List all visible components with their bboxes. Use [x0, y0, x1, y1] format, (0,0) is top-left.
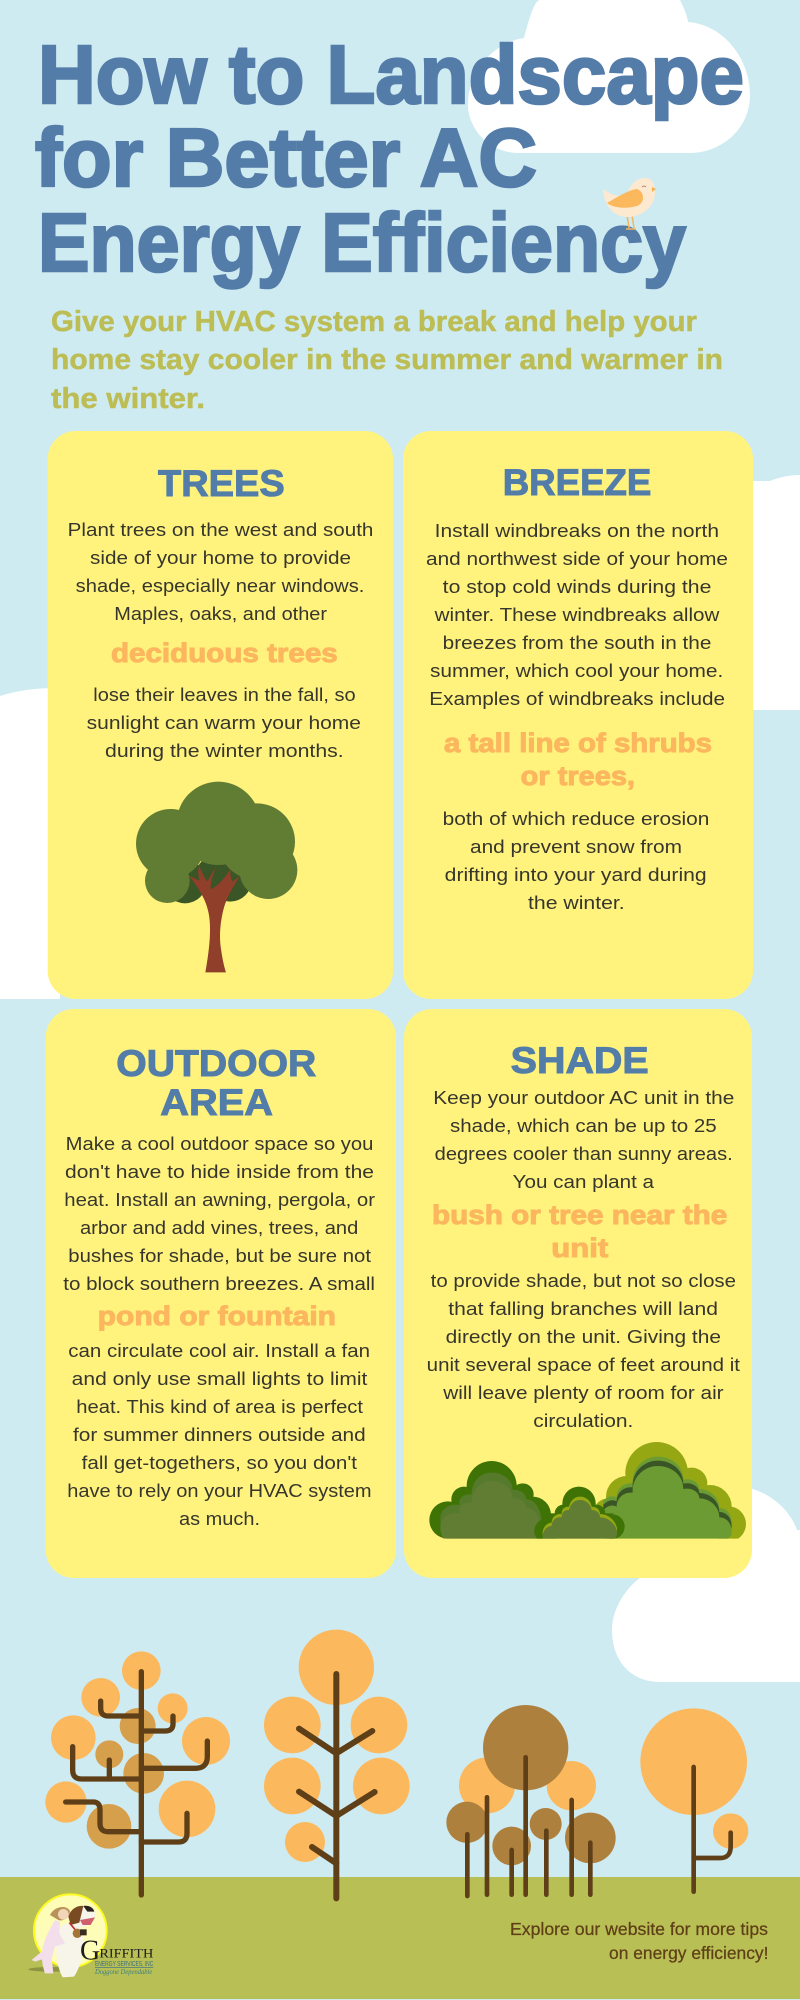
- logo wordmark: Doggone Dependable: [94, 1968, 152, 1976]
- text: shade intro: degrees cooler than sunny areas.: [435, 1143, 733, 1164]
- text: outdoor intro: Make a cool outdoor space so you: [66, 1133, 373, 1154]
- text: breeze intro: and northwest side of your home: [426, 548, 728, 569]
- text: shade continued: that falling branches will land: [448, 1298, 718, 1319]
- text: shade continued: unit several space of feet around it: [427, 1354, 740, 1375]
- text: shade continued: [427, 1270, 740, 1431]
- highlight: bush or tree near the unit: [432, 1200, 727, 1263]
- panel: trees: [48, 431, 393, 999]
- logo wordmark: G: [80, 1935, 100, 1966]
- orange tree 2: [264, 1630, 410, 1898]
- text: outdoor intro: [63, 1133, 375, 1294]
- text: shade intro: Keep your outdoor AC unit in the: [433, 1087, 734, 1108]
- text: breeze intro: breezes from the south in the: [443, 632, 711, 653]
- text: shade continued: circulation.: [533, 1410, 633, 1431]
- text: outdoor continued: have to rely on your HVAC system: [67, 1480, 372, 1501]
- text: breeze intro: winter. These windbreaks allow: [434, 604, 720, 625]
- panel: shade: [404, 1009, 752, 1578]
- heading: trees: TREES: [158, 463, 285, 504]
- icon: bushes: [429, 1442, 746, 1543]
- text: trees continued: lose their leaves in the fall, so: [93, 684, 356, 705]
- panel: breeze: [403, 431, 753, 999]
- heading: shade: SHADE: [511, 1040, 649, 1081]
- text: trees intro: Plant trees on the west and south: [68, 519, 373, 540]
- text: trees intro: side of your home to provide: [90, 547, 351, 568]
- text: trees intro: shade, especially near windows.: [76, 575, 364, 596]
- subtitle: home stay cooler in the summer and warmer in: [51, 344, 723, 376]
- icon: green tree: [136, 782, 297, 972]
- text: trees intro: [68, 519, 373, 624]
- text: outdoor intro: bushes for shade, but be sure not: [68, 1245, 371, 1266]
- text: shade continued: directly on the unit. Giving the: [446, 1326, 721, 1347]
- highlight: pond or fountain: pond or fountain: [98, 1301, 336, 1331]
- text: outdoor continued: and only use small lights to limit: [72, 1368, 367, 1389]
- text: outdoor continued: heat. This kind of area is perfect: [76, 1396, 363, 1417]
- highlight: tall line of shrubs: a tall line of shrubs: [444, 728, 712, 758]
- text: breeze continued: [443, 808, 709, 913]
- text: outdoor continued: can circulate cool air. Install a fan: [68, 1340, 370, 1361]
- icon: dog: [28, 1906, 95, 1977]
- text: breeze intro: [426, 520, 728, 709]
- heading: outdoor area: [116, 1043, 316, 1123]
- text: outdoor intro: to block southern breezes. A small: [63, 1273, 375, 1294]
- subtitle: [51, 306, 723, 415]
- text: outdoor continued: for summer dinners outside and: [73, 1424, 366, 1445]
- highlight: bush or tree near the unit: unit: [551, 1233, 608, 1263]
- logo wordmark: [80, 1935, 153, 1976]
- cloud: top right: [468, 0, 750, 153]
- text: breeze intro: Examples of windbreaks include: [429, 688, 725, 709]
- title: for Better AC: [35, 111, 537, 204]
- text: outdoor intro: don't have to hide inside from the: [65, 1161, 374, 1182]
- text: shade intro: You can plant a: [513, 1171, 655, 1192]
- text: breeze intro: Install windbreaks on the north: [435, 520, 719, 541]
- icon: bird: [603, 178, 656, 229]
- text: breeze continued: both of which reduce erosion: [443, 808, 709, 829]
- text: breeze continued: the winter.: [528, 892, 625, 913]
- text: trees continued: [87, 684, 361, 761]
- panel: outdoor area: [46, 1009, 396, 1578]
- text: outdoor continued: [67, 1340, 372, 1529]
- heading: outdoor area: AREA: [160, 1082, 273, 1123]
- logo wordmark: RIFFITH: [99, 1946, 153, 1960]
- text: shade continued: to provide shade, but not so close: [431, 1270, 736, 1291]
- title: [35, 28, 744, 289]
- orange tree 4: [640, 1708, 748, 1892]
- highlight: tall line of shrubs: or trees,: [521, 761, 635, 791]
- text: breeze continued: drifting into your yard during: [445, 864, 707, 885]
- text: trees intro: Maples, oaks, and other: [114, 603, 327, 624]
- text: breeze continued: and prevent snow from: [470, 836, 682, 857]
- subtitle: Give your HVAC system a break and help your: [51, 306, 697, 338]
- text: outdoor intro: heat. Install an awning, pergola, or: [64, 1189, 375, 1210]
- highlight: deciduous trees: deciduous trees: [111, 638, 338, 668]
- text: breeze intro: summer, which cool your home.: [430, 660, 723, 681]
- text: trees continued: during the winter months.: [105, 740, 344, 761]
- logo: Griffith Energy Services: [28, 1894, 153, 1977]
- text: shade intro: shade, which can be up to 25: [450, 1115, 717, 1136]
- icon: girl: [32, 1907, 70, 1973]
- text: outdoor intro: arbor and add vines, trees, and: [80, 1217, 358, 1238]
- title: Energy Efficiency: [38, 196, 686, 289]
- call to action: [510, 1919, 768, 1963]
- text: shade intro: [433, 1087, 734, 1192]
- text: outdoor continued: fall get-togethers, so you don't: [82, 1452, 357, 1473]
- cloud: left: [0, 688, 60, 999]
- highlight: tall line of shrubs: [444, 728, 712, 791]
- heading: breeze: BREEZE: [503, 462, 651, 503]
- text: outdoor continued: as much.: [179, 1508, 260, 1529]
- tree cluster: [446, 1705, 616, 1896]
- ground: [0, 1877, 800, 1999]
- heading: outdoor area: OUTDOOR: [116, 1043, 316, 1084]
- cloud: right: [740, 475, 800, 710]
- cloud: bottom right: [612, 1487, 800, 1682]
- text: shade continued: will leave plenty of room for air: [442, 1382, 724, 1403]
- call to action: on energy efficiency!: [609, 1943, 768, 1963]
- title: How to Landscape: [38, 28, 744, 121]
- orange tree 1: [45, 1651, 230, 1895]
- subtitle: the winter.: [51, 383, 205, 415]
- text: trees continued: sunlight can warm your home: [87, 712, 361, 733]
- call to action: Explore our website for more tips: [510, 1919, 768, 1939]
- text: breeze intro: to stop cold winds during the: [443, 576, 711, 597]
- logo wordmark: ENERGY SERVICES, INC: [95, 1961, 153, 1968]
- highlight: bush or tree near the unit: bush or tree near the: [432, 1200, 727, 1230]
